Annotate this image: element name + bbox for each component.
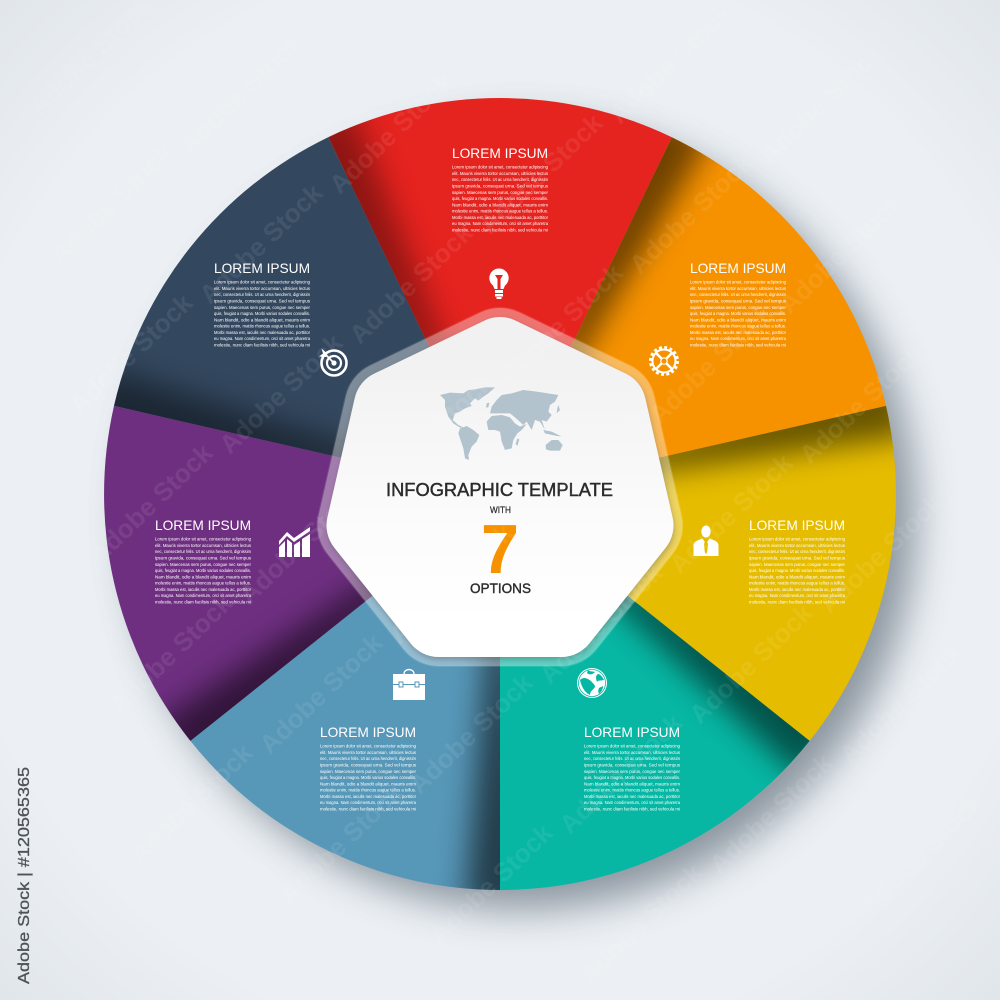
infographic canvas: Adobe Stock <box>833 637 969 770</box>
text block: purple segment: Lorem ipsum dolor sit amet, consectetur adipiscing <box>155 537 251 543</box>
subtitle: options: OPTIONS <box>470 581 531 596</box>
text block: purple segment: nec, consectetur felis. Ut ac urna hendrerit, dignissim <box>155 549 251 555</box>
text block: purple segment: quis, feugiat a magna. Morbi varius sodales convallis. <box>155 568 251 574</box>
infographic canvas: Adobe Stock <box>753 37 889 170</box>
infographic canvas: Adobe Stock <box>43 137 179 270</box>
text block: yellow segment: LOREM IPSUM <box>749 517 845 533</box>
panel: navy segment <box>114 137 430 458</box>
text block: purple segment: Nam blandit, odio a blandit aliquet, mauris enim <box>155 574 251 580</box>
text block: teal segment: Morbi massa est, iaculis nec malesuada ac, porttitor <box>584 794 680 800</box>
text block: blue segment: nec, consectetur felis. Ut ac urna hendrerit, dignissim <box>320 756 416 762</box>
text block: navy segment: molestie enim, mattis rhoncus augue tellus a tellus. <box>214 324 310 330</box>
text block: yellow segment: molestie enim, mattis rhoncus augue tellus a tellus. <box>749 581 845 587</box>
text block: navy segment: quis, feugiat a magna. Morbi varius sodales convallis. <box>214 311 310 317</box>
infographic canvas: Adobe Stock <box>573 857 709 990</box>
text block: yellow segment: ipsum gravida, consequat urna. Sed vel tempus <box>749 556 846 562</box>
text block: red segment: elit. Mauris viverra tortor accumsan, ultricies lectus <box>452 171 549 177</box>
text block: teal segment: nec, consectetur felis. Ut ac urna hendrerit, dignissim <box>584 756 680 762</box>
text block: teal segment: molestie enim, mattis rhoncus augue tellus a tellus. <box>584 788 680 794</box>
infographic canvas: Adobe Stock <box>533 557 669 690</box>
text block: navy segment: Morbi massa est, iaculis nec malesuada ac, porttitor <box>214 330 310 336</box>
panel: purple segment <box>104 406 372 741</box>
panel: orange segment <box>570 137 886 458</box>
text block: red segment: eu magna. Nam condimentum, orci sit amet pharetra <box>452 221 548 227</box>
text block: purple segment <box>155 517 252 605</box>
text block: orange segment: molestie enim, mattis rhoncus augue tellus a tellus. <box>690 324 786 330</box>
text block: purple segment: ipsum gravida, consequat urna. Sed vel tempus <box>155 556 252 562</box>
text block: yellow segment: molestie, nunc diam facilisis nibh, sed vehicula mi <box>749 599 845 605</box>
text block: blue segment: molestie enim, mattis rhoncus augue tellus a tellus. <box>320 788 416 794</box>
text block: teal segment: molestie, nunc diam facilisis nibh, sed vehicula mi <box>584 806 680 812</box>
text block: teal segment: ipsum gravida, consequat urna. Sed vel tempus <box>584 762 681 768</box>
infographic canvas: Adobe Stock <box>813 487 949 620</box>
subtitle: with: WITH <box>490 505 511 516</box>
text block: orange segment <box>690 260 787 348</box>
text block: blue segment: molestie, nunc diam facilisis nibh, sed vehicula mi <box>320 806 416 812</box>
text block: blue segment <box>320 724 417 812</box>
text block: red segment <box>452 145 549 233</box>
text block: navy segment: nec, consectetur felis. Ut ac urna hendrerit, dignissim <box>214 292 310 298</box>
text block: red segment: nec, consectetur felis. Ut ac urna hendrerit, dignissim <box>452 177 548 183</box>
text block: blue segment: Morbi massa est, iaculis nec malesuada ac, porttitor <box>320 794 416 800</box>
title: INFOGRAPHIC TEMPLATE <box>386 479 613 500</box>
text block: yellow segment: eu magna. Nam condimentum, orci sit amet pharetra <box>749 593 845 599</box>
text block: blue segment: Lorem ipsum dolor sit amet, consectetur adipiscing <box>320 744 416 750</box>
glass ring around the centre <box>362 353 638 624</box>
infographic canvas: Adobe Stock <box>123 737 259 870</box>
text block: orange segment: ipsum gravida, consequat urna. Sed vel tempus <box>690 298 787 304</box>
text block: navy segment: ipsum gravida, consequat urna. Sed vel tempus <box>214 298 311 304</box>
infographic canvas: Adobe Stock <box>663 447 799 580</box>
infographic canvas: Adobe Stock <box>603 0 739 130</box>
text block: teal segment: sapien. Maecenas sem purus, congue nec semper <box>584 769 680 775</box>
infographic canvas: Adobe Stock <box>623 147 759 280</box>
text block: red segment: molestie enim, mattis rhoncus augue tellus a tellus. <box>452 209 548 215</box>
infographic canvas: Adobe Stock <box>773 187 909 320</box>
icon: light bulb <box>489 268 509 299</box>
icon: person in suit <box>694 526 718 556</box>
text block: purple segment: elit. Mauris viverra tortor accumsan, ultricies lectus <box>155 543 252 549</box>
text block: red segment: molestie, nunc diam facilisis nibh, sed vehicula mi <box>452 227 548 233</box>
infographic canvas: Adobe Stock <box>343 217 479 350</box>
text block: blue segment: Nam blandit, odio a blandit aliquet, mauris enim <box>320 781 416 787</box>
text block: red segment: ipsum gravida, consequat urna. Sed vel tempus <box>452 184 549 190</box>
text block: teal segment: Lorem ipsum dolor sit amet, consectetur adipiscing <box>584 744 680 750</box>
infographic canvas: Adobe Stock <box>683 597 819 730</box>
text block: teal segment: LOREM IPSUM <box>584 724 680 740</box>
text block: teal segment <box>584 724 681 812</box>
text block: yellow segment: sapien. Maecenas sem purus, congue nec semper <box>749 562 845 568</box>
text block: yellow segment: Lorem ipsum dolor sit amet, consectetur adipiscing <box>749 537 845 543</box>
infographic canvas: Adobe Stock <box>213 327 349 460</box>
text block: blue segment: ipsum gravida, consequat urna. Sed vel tempus <box>320 762 417 768</box>
panel: white heptagon centre <box>362 353 638 621</box>
text block: red segment: Nam blandit, odio a blandit aliquet, mauris enim <box>452 202 548 208</box>
panel: yellow segment <box>628 406 896 741</box>
infographic canvas: Adobe Stock <box>493 257 629 390</box>
infographic canvas: Adobe Stock <box>403 667 539 800</box>
infographic canvas: Adobe Stock <box>83 437 219 570</box>
panel: red segment <box>328 98 672 347</box>
infographic canvas: Adobe Stock <box>703 747 839 880</box>
text block: orange segment: Morbi massa est, iaculis nec malesuada ac, porttitor <box>690 330 786 336</box>
text block: navy segment: LOREM IPSUM <box>214 260 310 276</box>
text block: blue segment: LOREM IPSUM <box>320 724 416 740</box>
icon: briefcase <box>393 670 425 700</box>
text block: red segment: quis, feugiat a magna. Morbi varius sodales convallis. <box>452 196 548 202</box>
text block: navy segment: Lorem ipsum dolor sit amet, consectetur adipiscing <box>214 280 310 286</box>
stock id caption: Adobe Stock | #120565365 <box>16 767 33 984</box>
infographic canvas: Adobe Stock <box>273 777 409 910</box>
text block: blue segment: quis, feugiat a magna. Morbi varius sodales convallis. <box>320 775 416 781</box>
text block: yellow segment: Nam blandit, odio a blandit aliquet, mauris enim <box>749 574 845 580</box>
infographic canvas: Adobe Stock <box>233 477 369 610</box>
text block: yellow segment: Morbi massa est, iaculis nec malesuada ac, porttitor <box>749 587 845 593</box>
text block: red segment: Lorem ipsum dolor sit amet, consectetur adipiscing <box>452 165 548 171</box>
number 7: 7 <box>481 510 519 588</box>
text block: orange segment: Nam blandit, odio a blandit aliquet, mauris enim <box>690 317 786 323</box>
text block: navy segment: sapien. Maecenas sem purus, congue nec semper <box>214 305 310 311</box>
text block: orange segment: LOREM IPSUM <box>690 260 786 276</box>
text block: yellow segment: nec, consectetur felis. Ut ac urna hendrerit, dignissim <box>749 549 845 555</box>
text block: orange segment: molestie, nunc diam facilisis nibh, sed vehicula mi <box>690 342 786 348</box>
infographic canvas: Adobe Stock <box>363 367 499 500</box>
infographic canvas: Adobe Stock <box>383 517 519 650</box>
text block: teal segment: eu magna. Nam condimentum, orci sit amet pharetra <box>584 800 680 806</box>
infographic canvas: Adobe Stock <box>173 27 309 160</box>
text block: navy segment: molestie, nunc diam facilisis nibh, sed vehicula mi <box>214 342 310 348</box>
infographic canvas: Adobe Stock <box>323 67 459 200</box>
text block: purple segment: molestie, nunc diam facilisis nibh, sed vehicula mi <box>155 599 251 605</box>
text block: orange segment: eu magna. Nam condimentum, orci sit amet pharetra <box>690 336 786 342</box>
text block: blue segment: eu magna. Nam condimentum, orci sit amet pharetra <box>320 800 416 806</box>
infographic canvas: Adobe Stock <box>643 297 779 430</box>
text block: teal segment: quis, feugiat a magna. Morbi varius sodales convallis. <box>584 775 680 781</box>
text block: purple segment: sapien. Maecenas sem purus, congue nec semper <box>155 562 251 568</box>
text block: purple segment: LOREM IPSUM <box>155 517 251 533</box>
text block: navy segment <box>214 260 311 348</box>
icon: bar chart with trend line <box>279 527 310 557</box>
text block: orange segment: elit. Mauris viverra tortor accumsan, ultricies lectus <box>690 286 787 292</box>
text block: red segment: Morbi massa est, iaculis nec malesuada ac, porttitor <box>452 215 548 221</box>
text block: orange segment: Lorem ipsum dolor sit amet, consectetur adipiscing <box>690 280 786 286</box>
text block: purple segment: Morbi massa est, iaculis nec malesuada ac, porttitor <box>155 587 251 593</box>
text block: orange segment: sapien. Maecenas sem purus, congue nec semper <box>690 305 786 311</box>
infographic canvas: Adobe Stock <box>193 177 329 310</box>
text block: blue segment: sapien. Maecenas sem purus, congue nec semper <box>320 769 416 775</box>
icon: gear <box>650 348 678 374</box>
text block: purple segment: molestie enim, mattis rhoncus augue tellus a tellus. <box>155 581 251 587</box>
infographic canvas: Adobe Stock <box>853 787 989 920</box>
text block: navy segment: eu magna. Nam condimentum, orci sit amet pharetra <box>214 336 310 342</box>
text block: red segment: sapien. Maecenas sem purus, congue nec semper <box>452 190 548 196</box>
text block: red segment: LOREM IPSUM <box>452 145 548 161</box>
infographic canvas: Adobe Stock <box>253 627 389 760</box>
text block: navy segment: Nam blandit, odio a blandit aliquet, mauris enim <box>214 317 310 323</box>
infographic canvas: Adobe Stock <box>103 587 239 720</box>
text block: yellow segment: elit. Mauris viverra tortor accumsan, ultricies lectus <box>749 543 846 549</box>
infographic canvas: Adobe Stock <box>513 407 649 540</box>
infographic canvas: Adobe Stock <box>793 337 929 470</box>
text block: yellow segment: quis, feugiat a magna. Morbi varius sodales convallis. <box>749 568 845 574</box>
icon: globe <box>577 668 607 698</box>
panel: teal segment <box>500 596 810 890</box>
text block: teal segment: Nam blandit, odio a blandit aliquet, mauris enim <box>584 781 680 787</box>
icon: target with arrow <box>319 348 346 376</box>
text block: orange segment: nec, consectetur felis. Ut ac urna hendrerit, dignissim <box>690 292 786 298</box>
text block: purple segment: eu magna. Nam condimentum, orci sit amet pharetra <box>155 593 251 599</box>
panel: blue segment <box>190 596 500 890</box>
icon: world map <box>440 387 563 460</box>
text block: orange segment: quis, feugiat a magna. Morbi varius sodales convallis. <box>690 311 786 317</box>
text block: navy segment: elit. Mauris viverra tortor accumsan, ultricies lectus <box>214 286 311 292</box>
text block: yellow segment <box>749 517 846 605</box>
infographic canvas: Adobe Stock <box>423 817 559 950</box>
text block: teal segment: elit. Mauris viverra tortor accumsan, ultricies lectus <box>584 750 681 756</box>
infographic canvas: Adobe Stock <box>473 107 609 240</box>
text block: blue segment: elit. Mauris viverra tortor accumsan, ultricies lectus <box>320 750 417 756</box>
infographic canvas: Adobe Stock <box>63 287 199 420</box>
infographic canvas: Adobe Stock <box>553 707 689 840</box>
